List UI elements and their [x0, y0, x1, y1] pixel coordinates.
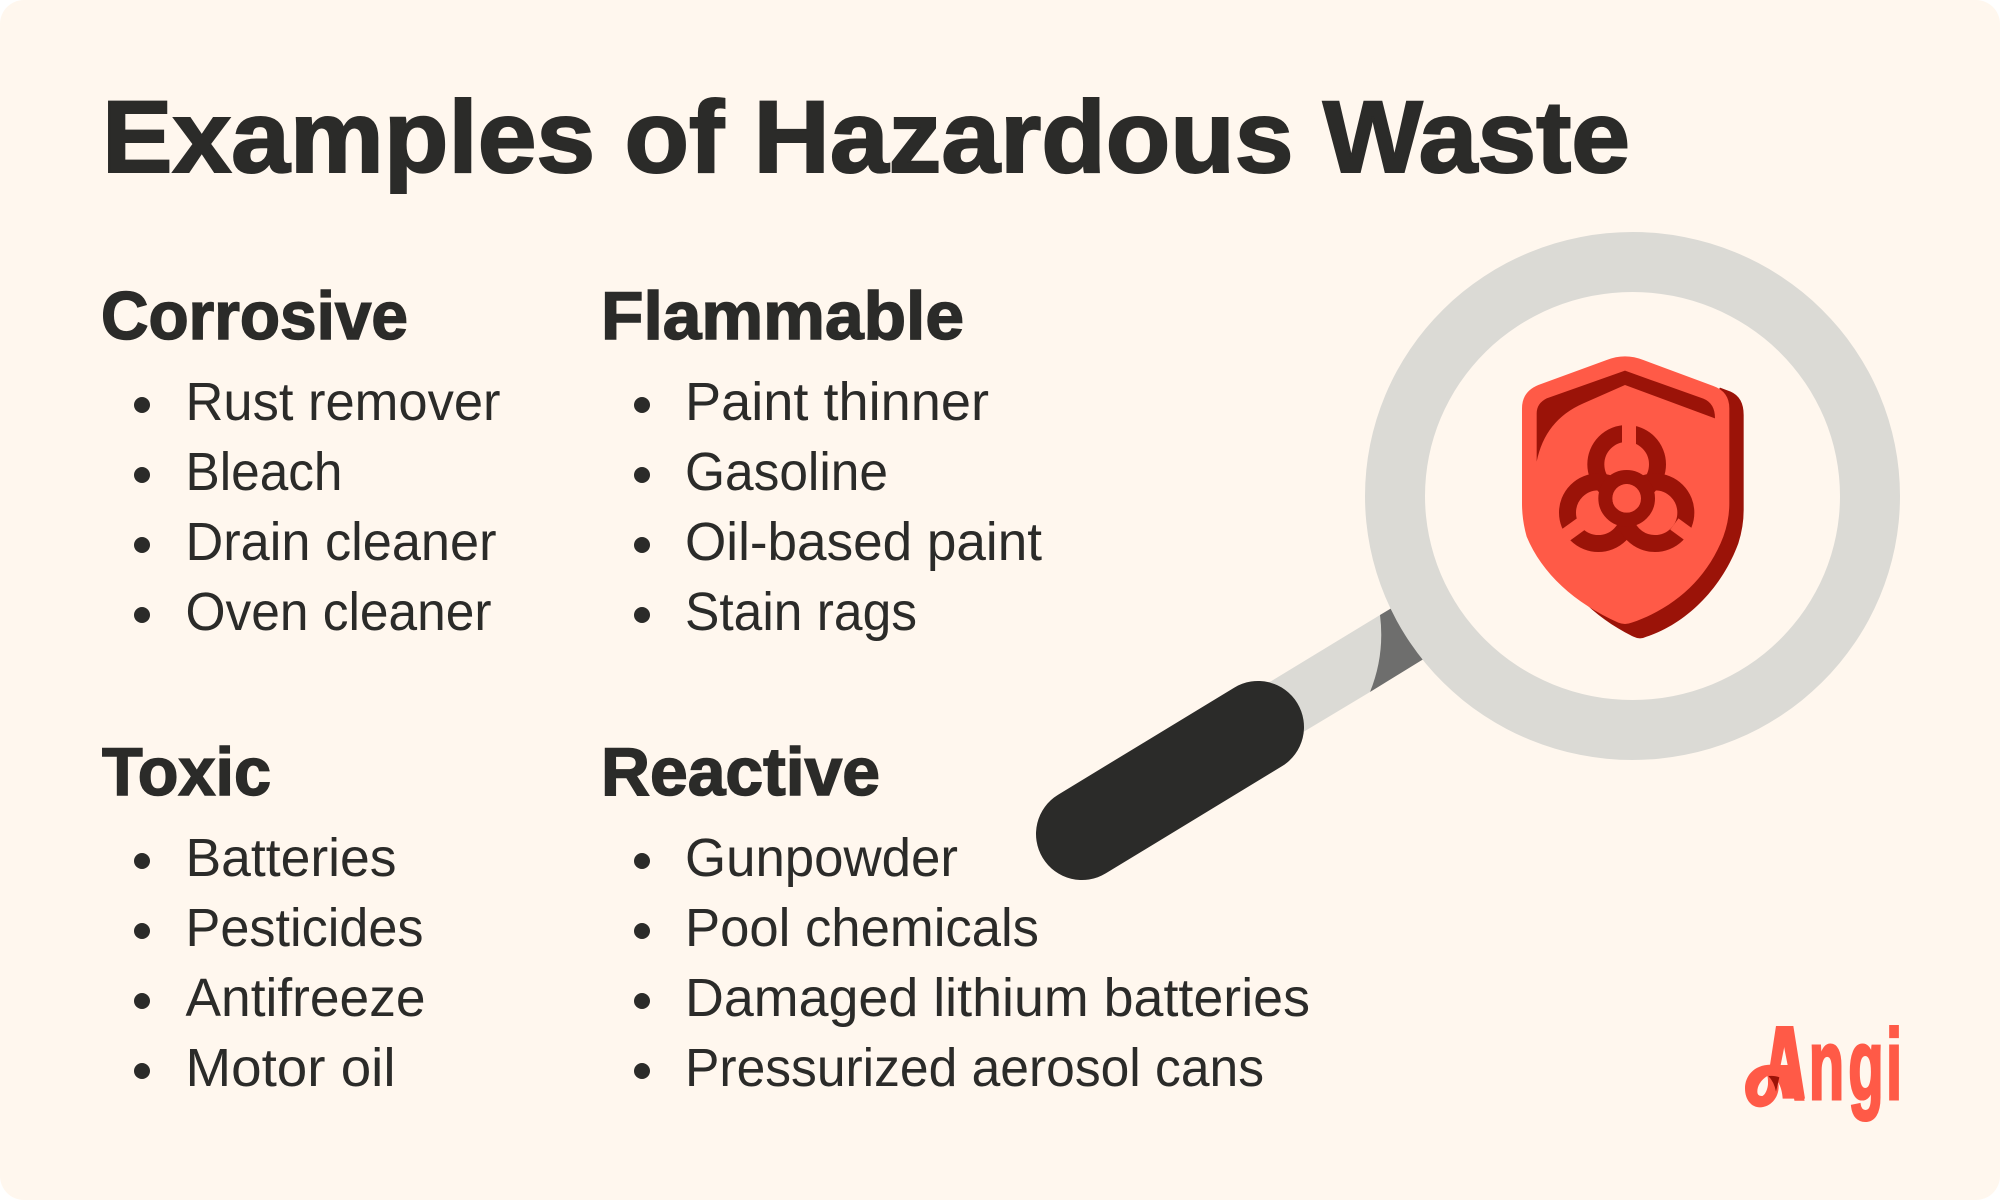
list: toxic: Antifreeze	[186, 968, 426, 1028]
magnifier ring	[1365, 232, 1900, 760]
list: flammable: Gasoline	[685, 442, 888, 502]
magnifier shaft	[1250, 615, 1381, 740]
panel: corrosive	[101, 278, 501, 642]
magnifier handle	[1082, 727, 1258, 834]
shield face	[1522, 356, 1729, 624]
icon: biohazard shield	[1522, 356, 1744, 638]
list: toxic: Batteries	[186, 828, 396, 888]
list: flammable: Oil-based paint	[685, 512, 1042, 572]
shield inner highlight	[1537, 371, 1715, 462]
logo swoosh	[1745, 1026, 1805, 1107]
panel: reactive	[601, 734, 1310, 1098]
list: reactive: Damaged lithium batteries	[685, 968, 1310, 1028]
heading: corrosive: Corrosive	[101, 278, 408, 354]
heading: reactive: Reactive	[601, 734, 880, 810]
list: corrosive	[134, 372, 501, 642]
list: corrosive: Oven cleaner	[186, 582, 492, 642]
list: flammable: Stain rags	[685, 582, 917, 642]
list: corrosive: Drain cleaner	[186, 512, 497, 572]
logo: Angi: Angi	[1763, 1010, 1902, 1121]
panel: flammable	[601, 278, 1042, 642]
magnifier shaft shadow	[1370, 606, 1435, 692]
title: Examples of Hazardous Waste	[102, 80, 1630, 194]
list: corrosive: Rust remover	[186, 372, 501, 432]
panel: toxic	[102, 734, 426, 1098]
biohazard symbol	[1561, 420, 1694, 543]
list: reactive: Gunpowder	[685, 828, 958, 888]
heading: flammable: Flammable	[601, 278, 964, 354]
list: reactive	[634, 828, 1310, 1098]
list: toxic: Motor oil	[186, 1038, 396, 1098]
list: reactive: Pool chemicals	[685, 898, 1039, 958]
list: flammable: Paint thinner	[685, 372, 989, 432]
list: toxic	[134, 828, 426, 1098]
list: toxic: Pesticides	[186, 898, 424, 958]
list: flammable	[634, 372, 1042, 642]
shield shadow	[1580, 388, 1744, 638]
list: corrosive: Bleach	[186, 442, 342, 502]
icon: magnifying glass	[1082, 232, 1900, 834]
heading: toxic: Toxic	[102, 734, 271, 810]
list: reactive: Pressurized aerosol cans	[685, 1038, 1264, 1098]
